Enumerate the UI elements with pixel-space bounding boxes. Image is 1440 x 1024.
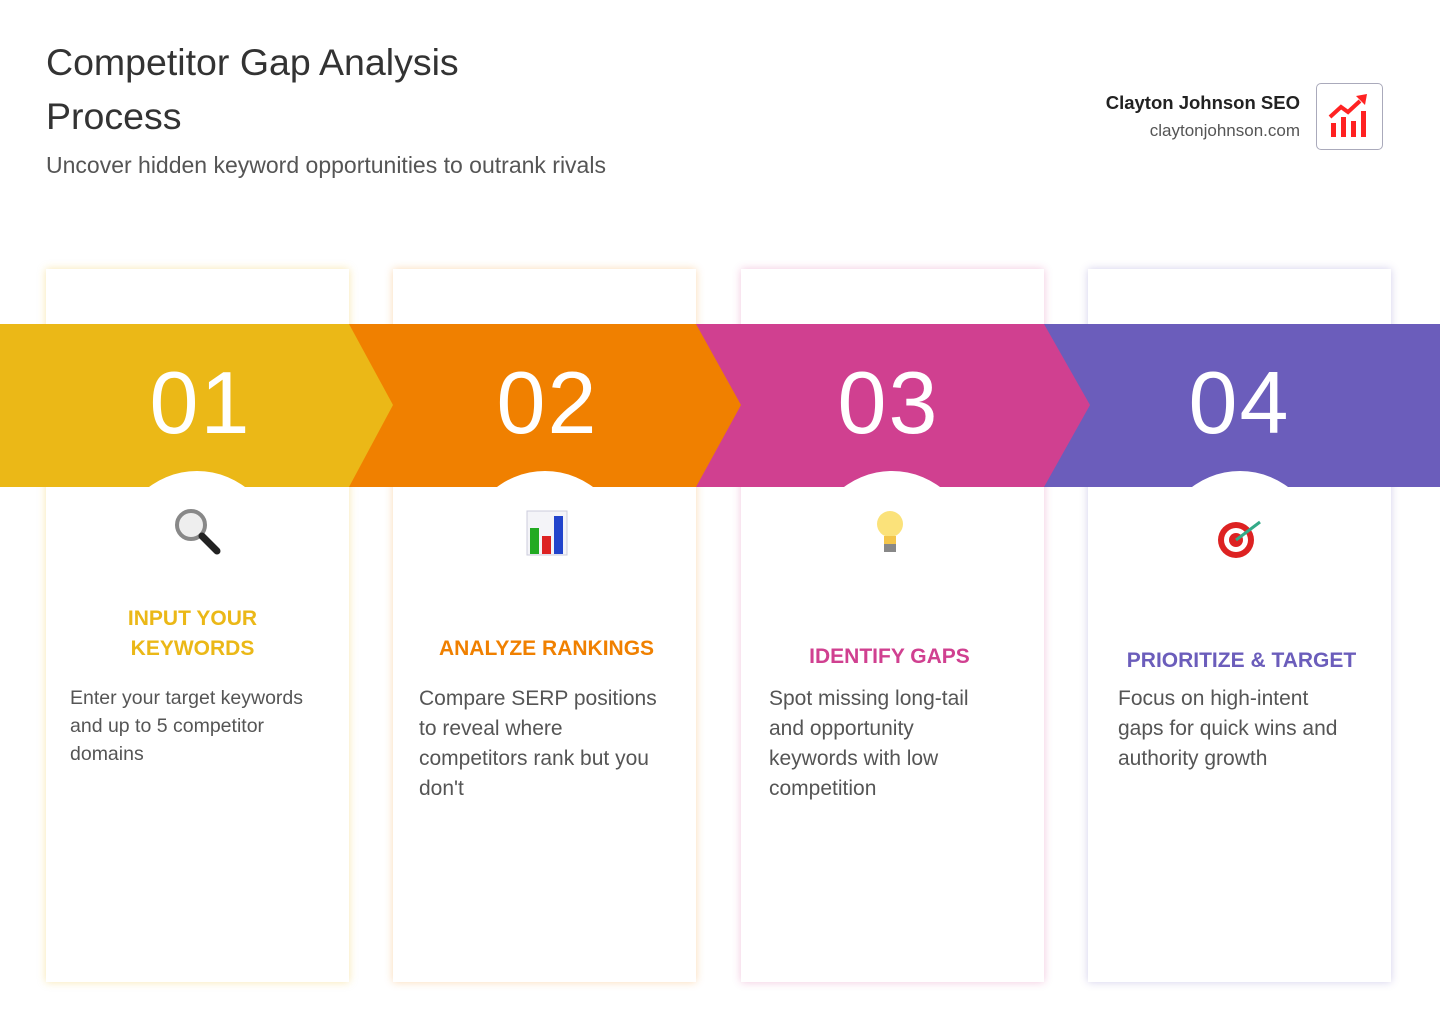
icon: bulb	[877, 511, 903, 552]
brand: claytonjohnson.com	[1150, 121, 1300, 140]
numbers: 01	[150, 353, 251, 452]
text: Compare SERP positions to reveal where competitors rank but you don't	[419, 687, 657, 800]
icon: magnifier	[175, 509, 220, 554]
icon: bar chart	[526, 510, 568, 556]
cards	[46, 269, 349, 982]
step 3 text: IDENTIFY GAPS	[809, 645, 970, 668]
step 1 text	[128, 607, 257, 660]
step 4 text: PRIORITIZE & TARGET	[1127, 649, 1356, 672]
step 2 text: ANALYZE RANKINGS	[439, 637, 654, 660]
subtitle: Uncover hidden keyword opportunities to outrank rivals	[46, 152, 606, 178]
title: Competitor Gap Analysis	[46, 41, 459, 83]
arrow band	[0, 324, 1440, 487]
text: 03	[838, 353, 939, 452]
icon: target	[1218, 520, 1261, 558]
title: Process	[46, 95, 181, 137]
icon: logo chart	[1316, 83, 1383, 150]
text: Enter your target keywords and up to 5 competitor domains	[70, 687, 303, 765]
step 1 text: KEYWORDS	[131, 637, 254, 660]
title	[46, 41, 459, 137]
text: 04	[1189, 353, 1290, 452]
brand	[1106, 92, 1300, 140]
brand: Clayton Johnson SEO	[1106, 92, 1300, 113]
text: 02	[497, 353, 598, 452]
step 1 text: INPUT YOUR	[128, 607, 257, 630]
text: Spot missing long-tail and opportunity keywords with low competition	[769, 687, 969, 800]
text: Focus on high-intent gaps for quick wins and authority growth	[1118, 687, 1337, 770]
